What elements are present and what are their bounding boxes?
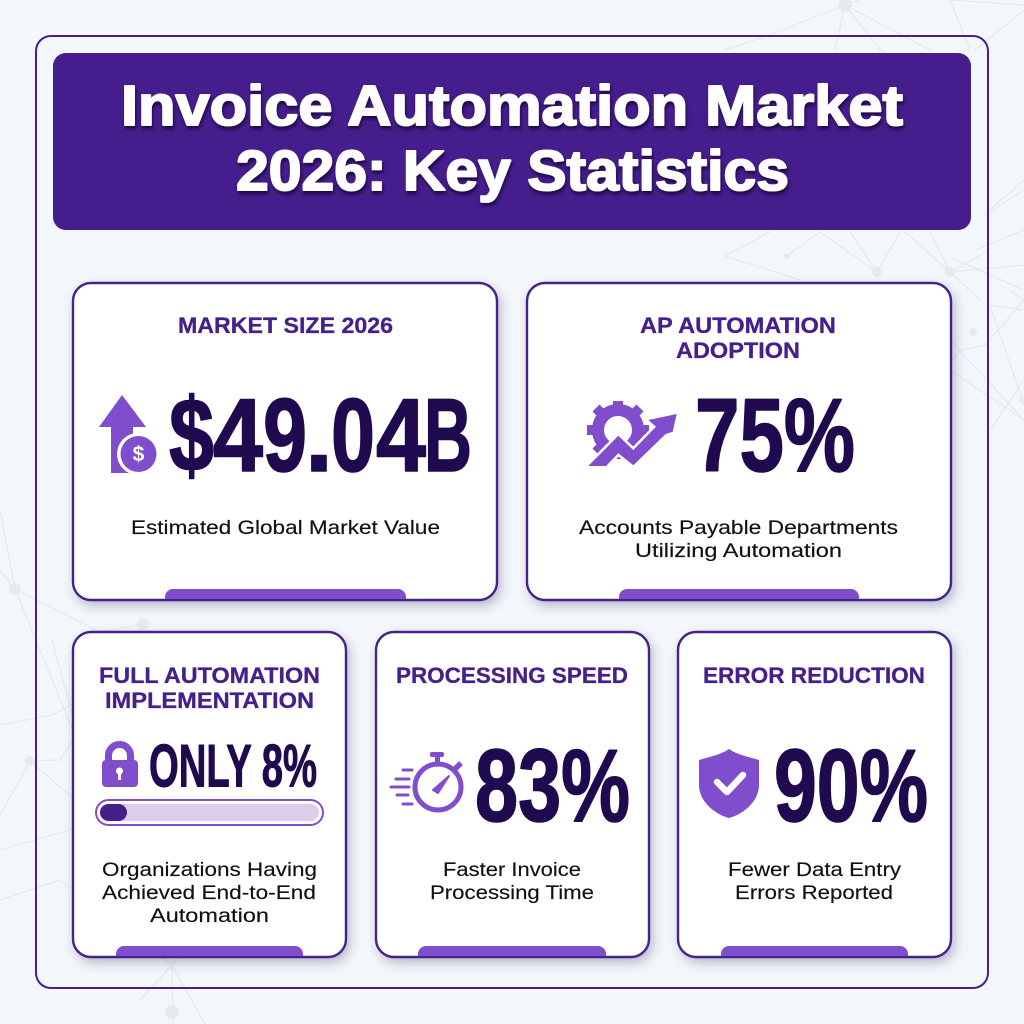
description: Achieved End-to-End: [102, 882, 316, 904]
stat value: B: [424, 378, 472, 494]
description: [728, 859, 901, 904]
icon: arrow with coin: $: [133, 443, 145, 466]
stat value: 9: [263, 378, 307, 494]
heading: ERROR REDUCTION: [703, 663, 925, 688]
description: Automation: [150, 905, 269, 927]
icon: arrow with coin: [99, 395, 159, 475]
description: Processing Time: [430, 882, 594, 904]
description: Organizations Having: [102, 859, 317, 881]
heading: [99, 663, 320, 713]
heading: MARKET SIZE 2026: [178, 313, 393, 338]
description: Accounts Payable Departments: [579, 517, 898, 539]
stat value: 4: [213, 378, 263, 494]
heading: [640, 313, 836, 363]
stat value: 75%: [695, 378, 855, 494]
description: [579, 517, 898, 562]
description: [430, 859, 594, 904]
title banner: [53, 53, 971, 230]
heading: ADOPTION: [676, 338, 800, 363]
stat value: 0: [331, 378, 375, 494]
heading: AP AUTOMATION: [640, 313, 836, 338]
panel: market size: [73, 283, 497, 600]
description: [102, 859, 317, 927]
stat value: 90%: [774, 728, 928, 843]
stat value: .: [305, 378, 333, 494]
heading: IMPLEMENTATION: [105, 688, 314, 713]
description: Faster Invoice: [443, 859, 581, 881]
description: Errors Reported: [735, 882, 893, 904]
icon: gear and rising arrow: [587, 401, 677, 466]
description: Fewer Data Entry: [728, 859, 901, 881]
stat value: ONLY 8%: [149, 732, 317, 800]
stat value: [169, 378, 472, 494]
panel: full automation implementation: [73, 632, 346, 957]
description: Utilizing Automation: [635, 540, 842, 562]
stat value: $: [169, 378, 214, 494]
stat value: 4: [376, 378, 426, 494]
progress bar: 8 percent: [96, 800, 323, 825]
heading: FULL AUTOMATION: [99, 663, 320, 688]
title: [121, 74, 903, 203]
title: 2026: Key Statistics: [236, 139, 789, 203]
icon: padlock: [102, 745, 138, 787]
icon: shield with check: [699, 749, 759, 818]
stat value: 83%: [475, 728, 630, 843]
panel: AP automation adoption: [527, 283, 951, 600]
description: Estimated Global Market Value: [131, 517, 440, 539]
panel: error reduction: [678, 632, 951, 957]
heading: PROCESSING SPEED: [396, 663, 628, 688]
panel: processing speed: [376, 632, 649, 957]
title: Invoice Automation Market: [121, 74, 903, 138]
icon: stopwatch: [391, 752, 461, 810]
